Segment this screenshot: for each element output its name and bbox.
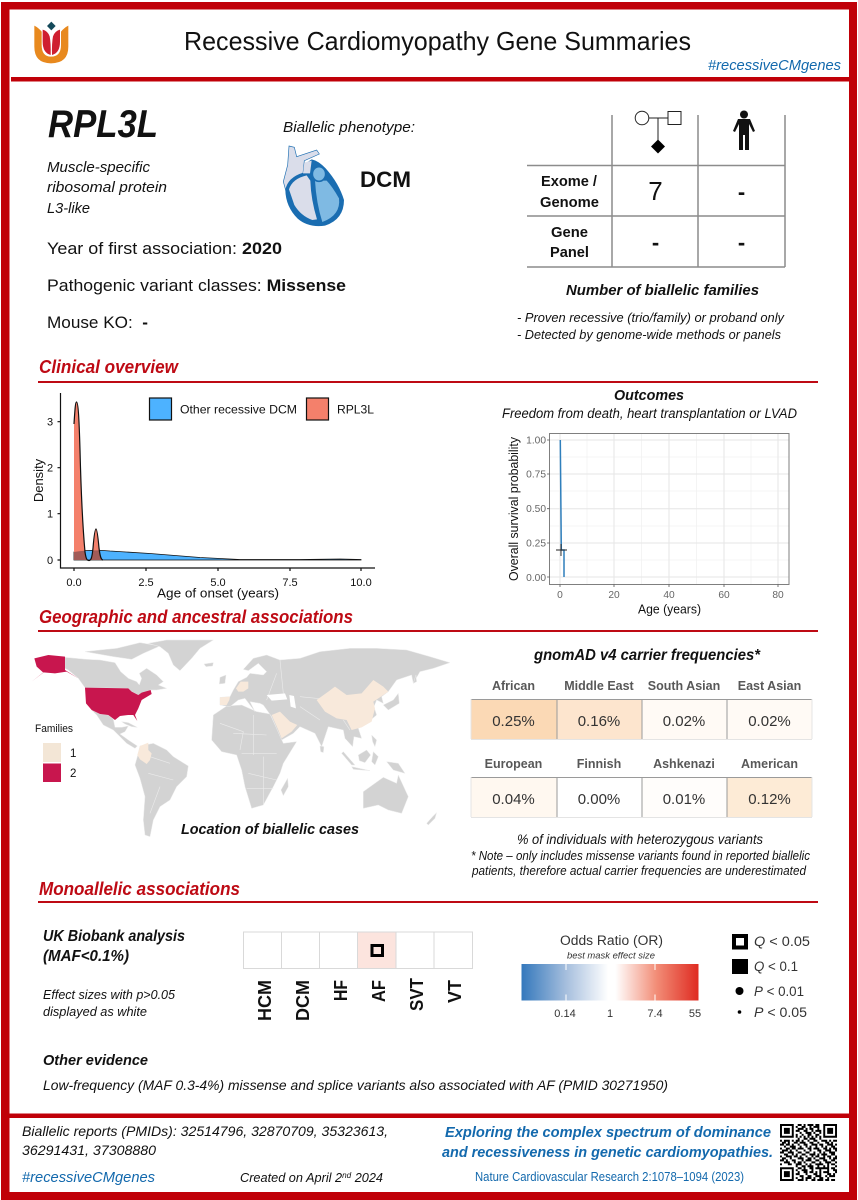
footer: created date: Created on April 2 <box>240 1171 340 1185</box>
significance legend: Q < 0.1 <box>754 958 798 974</box>
heatmap trait labels: VT <box>445 980 465 1003</box>
gnomAD population labels: African <box>492 679 535 693</box>
gnomAD population labels: European <box>485 757 542 771</box>
odds ratio colour scale: best mask effect size <box>567 950 655 962</box>
gnomAD notes: % of individuals with heterozygous variants <box>517 832 763 847</box>
one family countries <box>137 680 388 764</box>
survival tick labels: 0.25 <box>526 538 546 550</box>
density tick labels: 2 <box>47 462 53 474</box>
footer: paper title: and recessiveness in genetic cardiomyopathies. <box>442 1145 773 1161</box>
panel: number of biallelic families table <box>517 110 785 342</box>
density tick labels: 10.0 <box>350 577 372 589</box>
other recessive DCM curve <box>74 550 361 560</box>
censor mark <box>556 544 567 556</box>
density tick labels: 0 <box>47 555 53 567</box>
density tick labels: 3 <box>47 416 53 428</box>
table values: 7 <box>648 176 663 206</box>
outcomes subtitle: Freedom from death, heart transplantation or LVAD <box>502 406 797 421</box>
table notes <box>517 311 785 342</box>
density axis titles: Age of onset (years) <box>157 586 279 600</box>
footer: paper title <box>442 1125 773 1161</box>
gene description <box>47 159 167 217</box>
gnomAD cells row one: 0.25% <box>492 713 535 730</box>
heading: geographic and ancestral associations: Geographic and ancestral associations <box>39 607 353 627</box>
other evidence <box>43 1052 668 1093</box>
phenotype label: Biallelic phenotype: <box>283 120 415 136</box>
density tick labels: 7.5 <box>282 577 298 589</box>
gene description: Muscle-specific <box>47 159 150 176</box>
icon: heart <box>283 146 344 226</box>
variant classes: Pathogenic variant classes: Missense <box>47 276 346 295</box>
gnomAD notes: patients, therefore actual carrier frequencies are underestimated <box>471 864 807 878</box>
gray landmasses <box>65 640 450 837</box>
heading: clinical overview: Clinical overview <box>39 357 179 377</box>
table notes: - Proven recessive (trio/family) or proband only <box>517 311 785 325</box>
table values: - <box>652 230 659 255</box>
odds ratio colour scale <box>522 933 701 1020</box>
gnomAD population labels <box>485 679 801 771</box>
gnomAD cells row two: 0.00% <box>578 791 620 808</box>
gnomAD notes <box>471 832 811 878</box>
density legend: Other recessive DCM <box>180 402 297 416</box>
panel: gnomAD carrier frequencies <box>471 647 812 878</box>
heatmap trait labels: HCM <box>255 980 275 1021</box>
density tick labels: 1 <box>47 508 53 520</box>
gnomAD population labels: Middle East <box>564 679 635 693</box>
odds ratio colour scale: Odds Ratio (OR) <box>560 933 663 948</box>
title: Recessive Cardiomyopathy Gene Summaries <box>184 26 691 56</box>
gnomAD heading: gnomAD v4 carrier frequencies* <box>533 647 761 664</box>
footer: created date: 2024 <box>351 1171 383 1185</box>
icon: proband person <box>733 110 755 150</box>
RPL3L curve outline <box>74 402 103 560</box>
table notes: - Detected by genome-wide methods or panels <box>517 328 781 342</box>
map caption: Location of biallelic cases <box>181 821 359 838</box>
table caption: Number of biallelic families <box>566 282 759 299</box>
density legend <box>150 398 374 420</box>
row label: exome genome: Genome <box>540 194 599 211</box>
heatmap <box>244 932 472 1021</box>
survival tick labels: 60 <box>718 590 730 601</box>
survival tick labels <box>526 436 784 601</box>
gnomAD population labels: Ashkenazi <box>653 757 715 771</box>
gnomAD cells row one: 0.02% <box>663 713 705 730</box>
biobank heading: UK Biobank analysis <box>43 928 185 945</box>
survival tick labels: 0.50 <box>526 504 546 515</box>
density axes <box>58 393 375 571</box>
odds ratio colour scale: 55 <box>689 1008 701 1020</box>
gnomAD notes: * Note – only includes missense variants found in reported biallelic <box>471 849 811 863</box>
survival curve <box>560 440 564 577</box>
heading: monoallelic associations: Monoallelic associations <box>39 879 240 899</box>
country borders <box>148 660 350 813</box>
gnomAD cells row two: 0.12% <box>748 791 791 808</box>
gnomAD population labels: South Asian <box>648 679 720 693</box>
biobank note: Effect sizes with p>0.05 <box>43 987 176 1002</box>
odds ratio colour scale: 7.4 <box>647 1008 663 1020</box>
table values: - <box>738 180 745 204</box>
biobank heading: (MAF<0.1%) <box>43 948 129 965</box>
density axis titles <box>31 458 279 600</box>
density tick labels: 0.0 <box>66 577 82 589</box>
gnomAD population labels: Finnish <box>577 757 621 771</box>
seas <box>267 693 296 708</box>
density tick labels: 2.5 <box>138 577 154 589</box>
RPL3L curve <box>74 402 103 560</box>
table values <box>648 176 745 255</box>
footer: biallelic reports: Biallelic reports (PMIDs): 32514796, 32870709, 35323613, <box>22 1123 388 1139</box>
footer: citation: Nature Cardiovascular Research 2:1078–1094 (2023) <box>475 1170 744 1184</box>
biobank note: displayed as white <box>43 1004 147 1019</box>
table grid <box>527 115 785 267</box>
map legend: 2 <box>70 768 76 780</box>
panel: biallelic phenotype <box>283 120 415 226</box>
survival tick labels: 80 <box>772 590 784 601</box>
survival tick labels: 0.75 <box>526 470 546 480</box>
density tick labels <box>47 416 372 589</box>
gene description: L3-like <box>47 200 90 217</box>
survival axis titles <box>507 436 701 616</box>
row label: gene panel: Panel <box>550 244 589 261</box>
survival tick labels: 20 <box>608 590 620 601</box>
significance legend: P < 0.05 <box>754 1004 807 1020</box>
survival tick labels: 40 <box>663 590 675 601</box>
outcomes heading: Outcomes <box>614 387 684 404</box>
map legend: Families <box>35 723 73 735</box>
survival axis titles: Age (years) <box>638 602 701 616</box>
biobank heading <box>43 928 185 965</box>
gnomAD cells row two: 0.04% <box>492 791 535 808</box>
gene name: RPL3L <box>48 103 158 146</box>
survival axis titles: Overall survival probability <box>507 436 521 581</box>
survival plot <box>507 434 789 616</box>
other evidence: Low-frequency (MAF 0.3-4%) missense and splice variants also associated with AF (PMID 30271950) <box>43 1077 668 1093</box>
density legend: RPL3L <box>337 402 374 416</box>
survival tick labels: 0 <box>557 590 563 601</box>
footer: created date: nd <box>342 1171 352 1180</box>
mouse KO: Mouse KO: - <box>47 313 148 332</box>
significance legend <box>732 933 810 1020</box>
survival tick labels: 0.00 <box>526 573 546 584</box>
footer: biallelic reports: 36291431, 37308880 <box>22 1142 156 1158</box>
curve overlap <box>74 550 102 560</box>
icon: pedigree <box>635 111 681 154</box>
table values: - <box>738 230 745 255</box>
density axis titles: Density <box>31 458 46 502</box>
gnomAD population labels: American <box>741 757 798 771</box>
chart: age of onset density <box>31 393 375 600</box>
biobank note <box>43 987 176 1019</box>
significance legend: P < 0.01 <box>754 983 804 999</box>
row label: gene panel <box>550 224 589 261</box>
heatmap trait labels: DCM <box>293 980 313 1021</box>
odds ratio colour scale: 1 <box>607 1008 613 1020</box>
footer: hashtag: #recessiveCMgenes <box>22 1169 155 1186</box>
survival tick labels: 1.00 <box>526 436 546 446</box>
gnomAD cells row two <box>471 777 812 818</box>
significance marker <box>372 946 382 956</box>
gnomAD cells row one <box>471 699 812 740</box>
two family countries <box>32 655 152 721</box>
panel: outcomes <box>502 387 797 616</box>
hashtag: #recessiveCMgenes <box>708 57 841 74</box>
QR code <box>780 1125 837 1180</box>
row label: exome genome <box>540 173 599 211</box>
gnomAD cells row one: 0.02% <box>748 713 791 730</box>
map legend: 1 <box>70 748 76 760</box>
map legend <box>35 723 76 782</box>
heatmap trait labels: SVT <box>407 978 427 1011</box>
footer: paper title: Exploring the complex spectrum of dominance <box>445 1125 771 1141</box>
odds ratio colour scale: 0.14 <box>554 1008 576 1020</box>
gene description: ribosomal protein <box>47 179 167 196</box>
panel: gene summary <box>47 103 346 332</box>
other evidence: Other evidence <box>43 1052 148 1069</box>
footer: biallelic reports <box>22 1123 388 1158</box>
year of first association: Year of first association: 2020 <box>47 239 282 258</box>
panel: UK Biobank analysis <box>43 928 810 1021</box>
gnomAD population labels: East Asian <box>738 679 801 693</box>
significance legend: Q < 0.05 <box>754 933 810 949</box>
density tick labels: 5.0 <box>210 577 226 589</box>
heatmap trait labels <box>255 978 465 1021</box>
row label: exome genome: Exome / <box>541 173 598 190</box>
heatmap trait labels: HF <box>331 980 351 1001</box>
world map of biallelic cases <box>32 640 450 838</box>
phenotype name: DCM <box>360 167 411 192</box>
logo <box>34 22 68 63</box>
row label: gene panel: Gene <box>551 224 588 241</box>
gnomAD cells row one: 0.16% <box>578 713 620 730</box>
heatmap trait labels: AF <box>369 980 389 1002</box>
gnomAD cells row two: 0.01% <box>663 791 705 808</box>
